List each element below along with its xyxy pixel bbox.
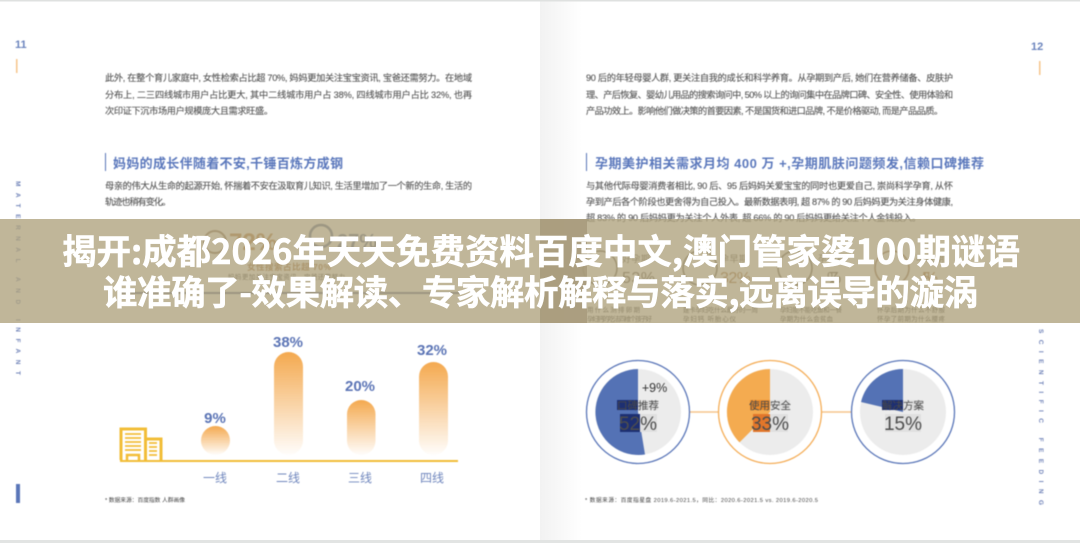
right page bbox=[583, 41, 1044, 505]
hidden stats behind banner right: 32% bbox=[720, 270, 751, 287]
blue marker left bbox=[16, 484, 20, 503]
intro paragraph right bbox=[586, 72, 953, 116]
pie: 52% bbox=[586, 360, 690, 464]
hidden stats behind banner right: 孕中期 bbox=[818, 253, 846, 264]
hidden stats behind banner right: 怀孕后期为什么不舒服 bbox=[877, 305, 946, 314]
bar 一线: 9% bbox=[204, 410, 226, 427]
connector lines bbox=[690, 411, 851, 413]
pie: 33% bbox=[718, 360, 822, 464]
paragraph right bbox=[586, 180, 953, 223]
hidden stats behind banner right: 孕晚期 bbox=[916, 254, 944, 264]
orange tick right bbox=[1039, 61, 1040, 75]
intro paragraph right: 90 后的年轻母婴人群, 更关注自我的成长和科学养育。从孕期到产后, 她们在营养储备、皮肤护 bbox=[586, 72, 953, 83]
pie charts bbox=[586, 360, 954, 464]
hidden stats behind banner right: 孕妇能不能吃鱼和一餐 bbox=[780, 305, 842, 314]
hidden stats behind banner left: 27% bbox=[337, 231, 377, 253]
hidden stats behind banner right: 好孕期 bbox=[622, 253, 650, 264]
bar 二线: 38% bbox=[273, 334, 303, 351]
footnote left: * 数据来源：百度指数 人群画像 bbox=[105, 496, 185, 504]
bar 二线 bbox=[273, 334, 303, 485]
orange tick left bbox=[16, 59, 18, 73]
title bbox=[62, 224, 1020, 315]
pie: 33%: 33% bbox=[751, 414, 789, 435]
left page bbox=[14, 39, 472, 504]
hidden stats behind banner right: 孕妇钙 听胎心仪 bbox=[683, 314, 736, 323]
page number 11: 11 bbox=[15, 39, 27, 51]
hidden stats behind banner right: 孕妇钙的吃法 四维个孩子好 bbox=[587, 314, 652, 323]
intro paragraph right: 产品功效上。影响他们做决策的首要因素, 不是国货和进口品牌, 不是价格驱动, 而是产品品质。 bbox=[586, 105, 943, 116]
vertical label right: SCIENTIFIC FEEDING bbox=[1037, 329, 1044, 505]
pie: 15%: 15% bbox=[884, 414, 922, 435]
icon: buildings bbox=[121, 429, 161, 460]
hidden stats behind banner right: 孕期为什么会贫血 bbox=[780, 314, 834, 323]
paragraph right: 孕到产后各个阶段也更舍得为自己投入。最新数据表明, 超 87% 的 90 后妈妈更为关注身体健康, bbox=[586, 196, 953, 207]
intro paragraph left: 此外, 在整个育儿家庭中, 女性检索占比超 70%, 妈妈更加关注宝宝资讯, 宝爸还需努力。在地域 bbox=[105, 72, 472, 83]
hidden stats behind banner left: 妈妈更加关注宝宝资讯，宝爸还需努力 bbox=[228, 272, 345, 281]
axis line bbox=[120, 460, 458, 462]
pie: 52%: 口碑推荐 bbox=[617, 399, 659, 412]
intro paragraph left: 分布上, 二三四线城市用户占比更大, 其中二线城市用户占 38%, 四线城市用户占比 32%, 也再 bbox=[105, 89, 472, 100]
hidden stats behind banner left bbox=[120, 225, 460, 294]
paragraph left bbox=[105, 180, 472, 207]
pie: 52%: +9% bbox=[642, 381, 667, 395]
bar 四线 bbox=[417, 342, 448, 485]
page number 12: 12 bbox=[1031, 41, 1043, 53]
hidden stats behind banner right: 7% bbox=[827, 270, 841, 287]
heading left: 妈妈的成长伴随着不安,千锤百炼方成钢 bbox=[113, 156, 343, 171]
pie: 15% bbox=[852, 360, 954, 464]
pie: 15%: 解决方案 bbox=[882, 399, 924, 412]
paragraph left: 母亲的伟大从生命的起源开始, 怀揣着不安在汲取育儿知识, 生活里增加了一个新的生命, 生活的 bbox=[105, 180, 472, 191]
title: 谁准确了-效果解读、专家解析解释与落实,远离误导的漩涡 bbox=[103, 265, 978, 315]
pie: 52%: 52% bbox=[619, 414, 657, 435]
footnote right: * 数据来源：百度指星盘 2019.6-2021.5，同比：2020.6-2021.5 vs. 2019.6-2020.5 bbox=[585, 496, 818, 504]
paragraph right: 超 83% 的 90 后妈妈更为关注个人外表, 超 66% 的 90 后妈妈更给关注个人金钱投入。 bbox=[586, 212, 921, 223]
paragraph left: 轨迹也稍有变化。 bbox=[105, 196, 171, 207]
hidden stats behind banner right: 53% bbox=[622, 270, 655, 287]
bar 三线 bbox=[345, 378, 376, 485]
vertical label left: MATERNAL AND INFANT bbox=[14, 181, 21, 375]
intro paragraph left bbox=[105, 72, 472, 116]
intro paragraph right: 理、产后恢复、婴幼儿用品的搜索询问中, 50% 以上的询问集中在品牌口碑、安全性、使用体验和 bbox=[586, 89, 953, 100]
bar 四线: 32% bbox=[417, 342, 447, 359]
bar 四线: 四线 bbox=[420, 471, 444, 485]
hidden stats behind banner right bbox=[583, 251, 946, 323]
heading right: 孕期美护相关需求月均 400 万 +,孕期肌肤问题频发,信赖口碑推荐 bbox=[595, 156, 984, 171]
hidden stats behind banner right: 用什么测排卵期 bbox=[587, 305, 640, 314]
hidden stats behind banner left: 女性搜索占比超 70% bbox=[247, 262, 331, 272]
paragraph right: 与其他代际母婴消费者相比, 90 后、95 后妈妈关爱宝宝的同时也更爱自己, 崇尚科学孕育, 从怀 bbox=[586, 180, 953, 191]
bar 一线: 一线 bbox=[203, 471, 227, 485]
intro paragraph left: 次印证下沉市场用户规模庞大且需求旺盛。 bbox=[105, 105, 273, 116]
bar 二线: 二线 bbox=[276, 471, 300, 485]
hidden stats behind banner right: 孕早期 bbox=[720, 254, 748, 264]
hidden stats behind banner left: 72% bbox=[229, 229, 277, 256]
hidden stats behind banner right: 建卡孕妇吃什么最好的一周 bbox=[683, 305, 758, 314]
pie: 33%: 使用安全 bbox=[749, 399, 791, 412]
bar 三线: 20% bbox=[345, 378, 375, 395]
banner overlay bbox=[0, 219, 1080, 323]
bar chart: city tiers bbox=[120, 334, 458, 485]
bar 一线 bbox=[201, 410, 230, 485]
hidden stats behind banner right: 怀孕了前期为什么腰疼 bbox=[877, 314, 946, 323]
bar 三线: 三线 bbox=[348, 471, 372, 485]
hidden stats behind banner right: 5% bbox=[922, 270, 938, 287]
title: 揭开:成都2026年天天免费资料百度中文,澳门管家婆100期谜语 bbox=[62, 224, 1020, 274]
